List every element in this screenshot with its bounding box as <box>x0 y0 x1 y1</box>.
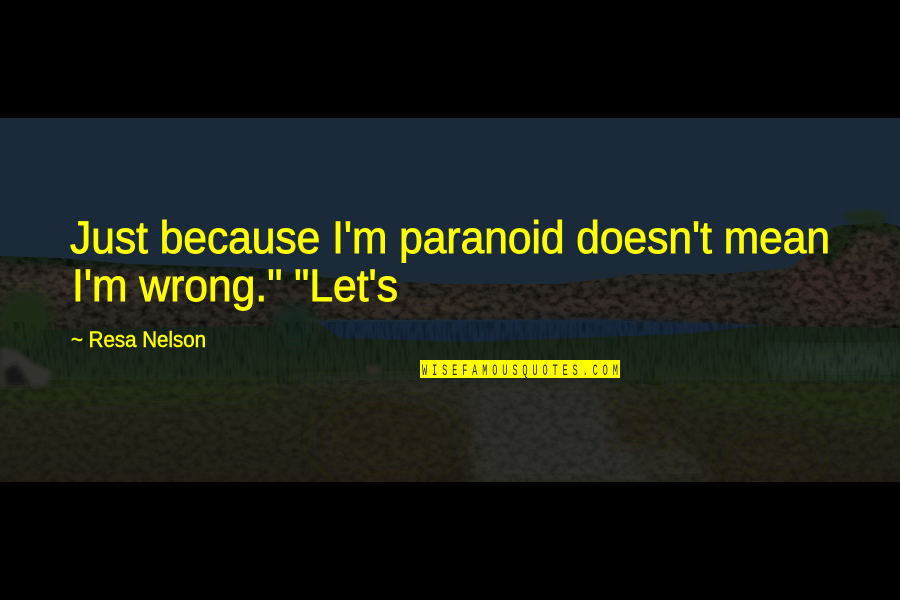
sky <box>0 118 900 348</box>
lake water <box>323 317 754 327</box>
boulder <box>0 347 52 387</box>
rocky hills and cliff <box>0 210 900 340</box>
watermark badge: WISEFAMOUSQUOTES.COM <box>422 361 618 380</box>
background photo band <box>0 118 900 482</box>
quote card <box>0 118 900 482</box>
author: ~ Resa Nelson <box>71 327 206 352</box>
quote line 2: I'm wrong." "Let's <box>72 260 398 311</box>
small rock <box>365 365 381 375</box>
quote text <box>70 212 830 352</box>
dirt path <box>322 378 709 480</box>
grass bank <box>0 290 900 392</box>
cliff treetop <box>844 210 888 224</box>
quote line 1: Just because I'm paranoid doesn't mean <box>70 212 830 263</box>
foreground ground <box>0 378 900 482</box>
